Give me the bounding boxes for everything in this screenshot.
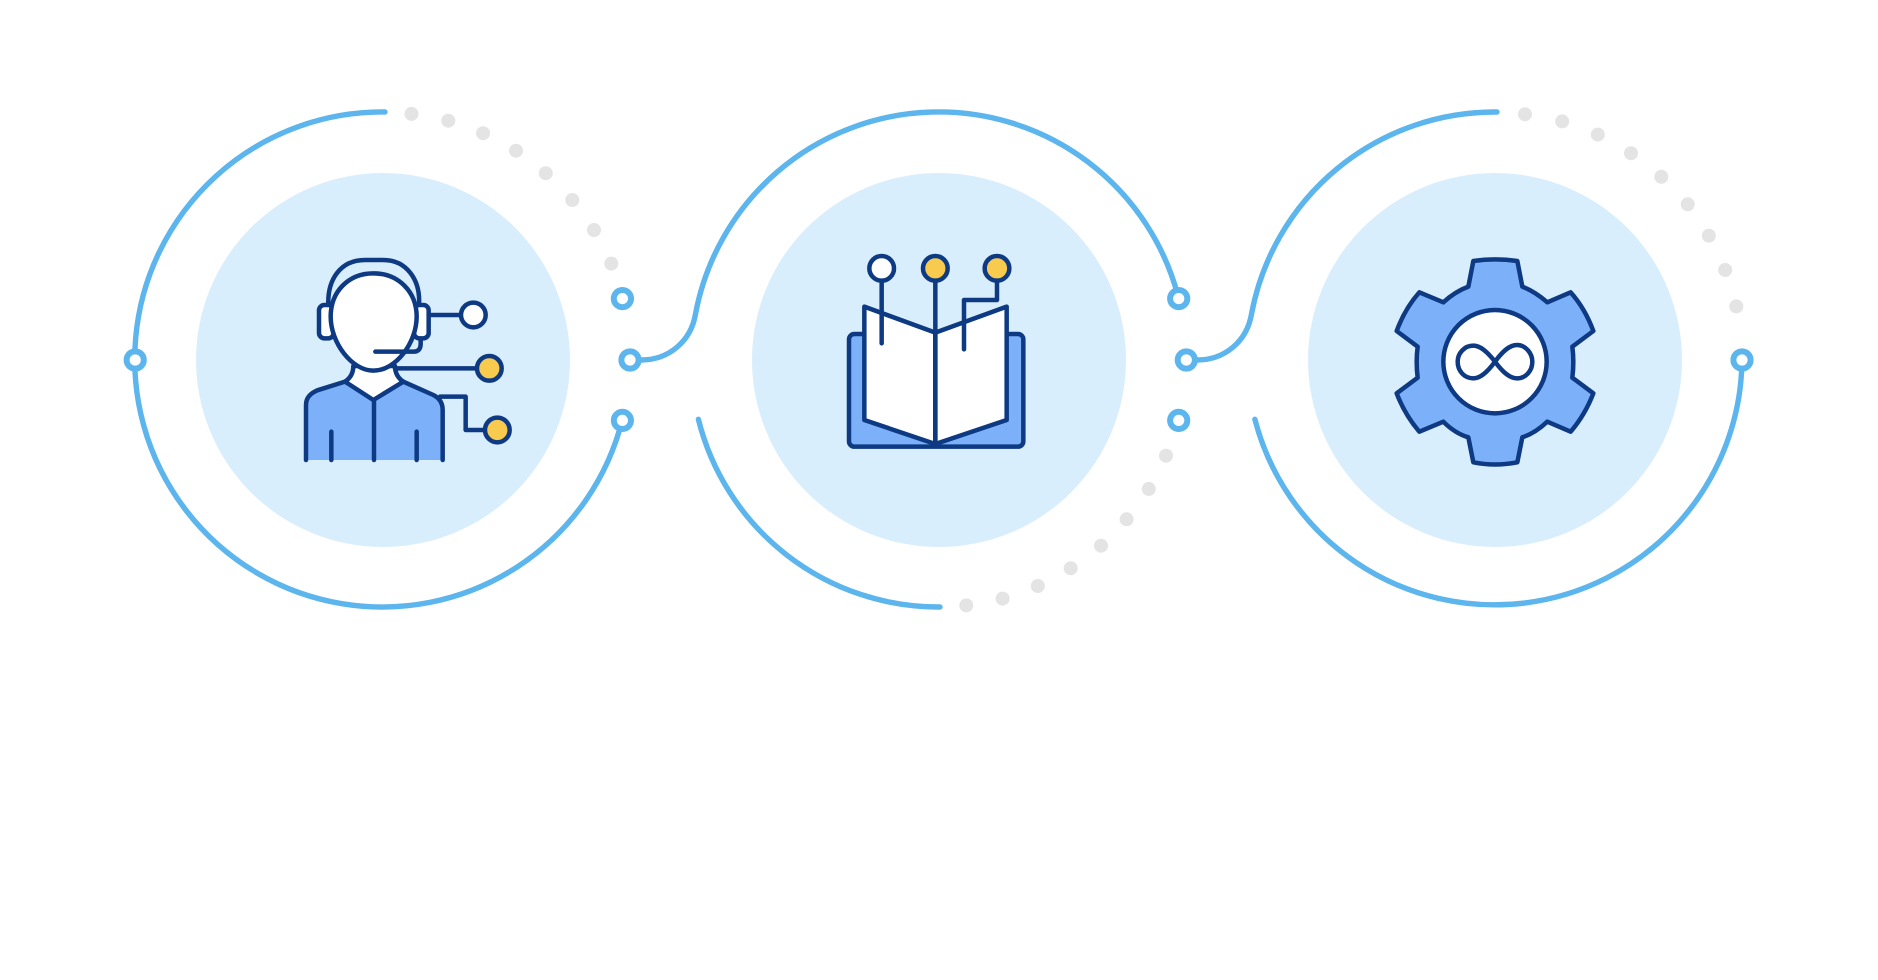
headband: [328, 260, 419, 305]
panel: step 2 digital book: [621, 112, 1187, 612]
left page: [864, 307, 935, 444]
dotted arc 2: [959, 449, 1173, 612]
body outline: [306, 382, 443, 460]
infinity symbol: [1458, 345, 1532, 378]
microphone: [375, 339, 421, 352]
background disc 3: [1308, 173, 1682, 547]
circuit lines: [882, 281, 997, 444]
agent body: [306, 382, 443, 460]
connector lines: [395, 315, 484, 430]
face: [331, 273, 417, 371]
ear cups: [319, 305, 334, 338]
gear body: [1397, 259, 1593, 464]
icon: agent with headset and connected nodes: [306, 260, 510, 460]
ring 3 nodes: [1178, 351, 1751, 369]
dotted arc 1: [404, 107, 618, 271]
ring 3 lower arc: [1255, 360, 1742, 605]
neck: [345, 366, 403, 400]
ring 1 nodes: [127, 290, 631, 429]
background disc 1: [196, 173, 570, 547]
gear centre: [1443, 310, 1547, 413]
dotted arc 3: [1518, 107, 1743, 313]
ring 1: [135, 112, 622, 607]
connected dots: [461, 303, 486, 327]
ring 2 lower arc: [698, 419, 940, 607]
right page: [935, 307, 1007, 444]
panel: step 3 continuous gear: [1178, 107, 1751, 605]
icon: gear with infinity symbol: [1397, 259, 1593, 464]
ring 3 upper arc with connector: [1197, 112, 1497, 360]
ring 2 upper arc with connector: [641, 112, 1179, 360]
book cover: [849, 334, 1023, 447]
icon: open book with circuit nodes: [849, 256, 1023, 447]
ring 2 nodes: [621, 290, 1187, 429]
panel: step 1 support agent: [127, 107, 631, 607]
circuit dots: [869, 256, 894, 281]
background disc 2: [752, 173, 1126, 547]
